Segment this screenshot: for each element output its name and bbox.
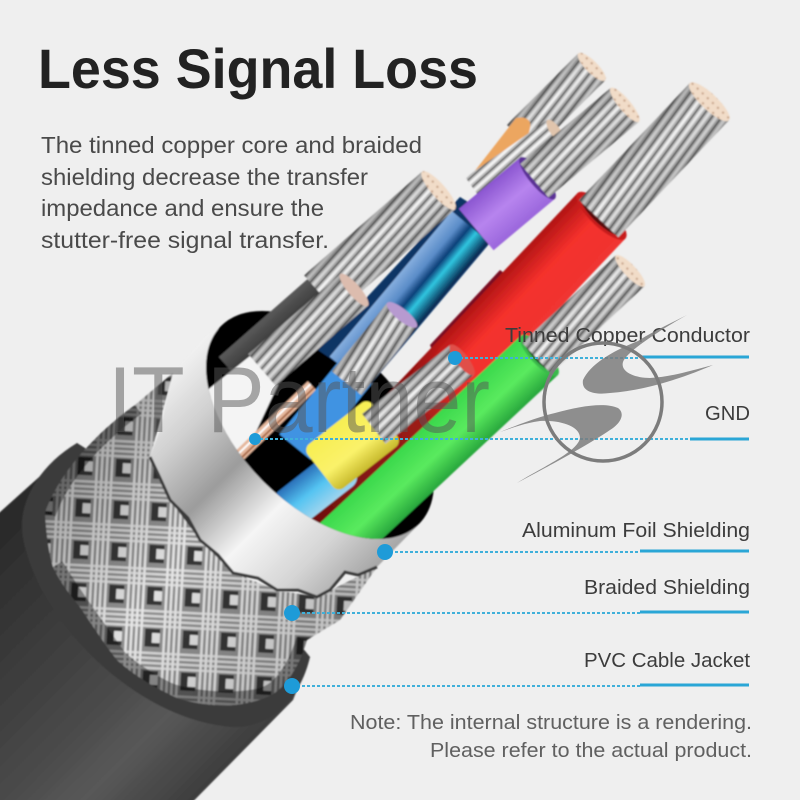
- note: Note: The internal structure is a rendering.: [350, 712, 752, 734]
- callout: PVC cable jacket: [284, 650, 750, 694]
- description text: impedance and ensure the: [41, 195, 324, 221]
- callout: GND: [249, 403, 750, 445]
- wire: inner strand behind purple: [466, 119, 561, 194]
- aluminum foil shielding: [150, 325, 419, 597]
- wire: white: [208, 273, 370, 450]
- callout: PVC cable jacket: PVC Cable Jacket: [584, 650, 750, 672]
- callout: aluminum foil shielding: [377, 520, 750, 560]
- wire: dark red: [429, 269, 504, 348]
- wire: orange: [475, 52, 606, 171]
- wire: light blue: [276, 462, 358, 520]
- description text: stutter-free signal transfer.: [41, 227, 329, 253]
- wire: blue: [318, 197, 505, 385]
- watermark: logo: [500, 315, 713, 483]
- note: Please refer to the actual product.: [430, 740, 752, 762]
- note: [350, 712, 752, 762]
- cable jacket: [0, 443, 310, 800]
- cable opening: [164, 269, 476, 581]
- description text: [41, 132, 422, 253]
- wire: purple: [459, 80, 647, 250]
- description text: The tinned copper core and braided: [41, 132, 422, 158]
- wire: red: [312, 82, 730, 523]
- callout: aluminum foil shielding: Aluminum Foil Shielding: [522, 520, 750, 542]
- callout: tinned copper conductor: [448, 325, 750, 365]
- callout: braided shielding: [284, 577, 750, 621]
- wire: copper drain: [236, 381, 316, 459]
- wire: blue sheath: [279, 298, 421, 460]
- conductors: [208, 52, 730, 540]
- description text: shielding decrease the transfer: [41, 164, 368, 190]
- watermark: IT Partner: IT Partner: [108, 347, 490, 452]
- title: Less Signal Loss: [38, 37, 478, 100]
- callout: GND: GND: [705, 403, 750, 425]
- wire: black: [218, 170, 458, 370]
- wire: yellow: [305, 344, 476, 490]
- callout: braided shielding: Braided Shielding: [584, 577, 750, 599]
- braided shielding: [44, 374, 376, 706]
- callout: tinned copper conductor: Tinned Copper Conductor: [505, 325, 750, 347]
- wire: green: [320, 254, 646, 540]
- foil torn edge: [150, 457, 377, 597]
